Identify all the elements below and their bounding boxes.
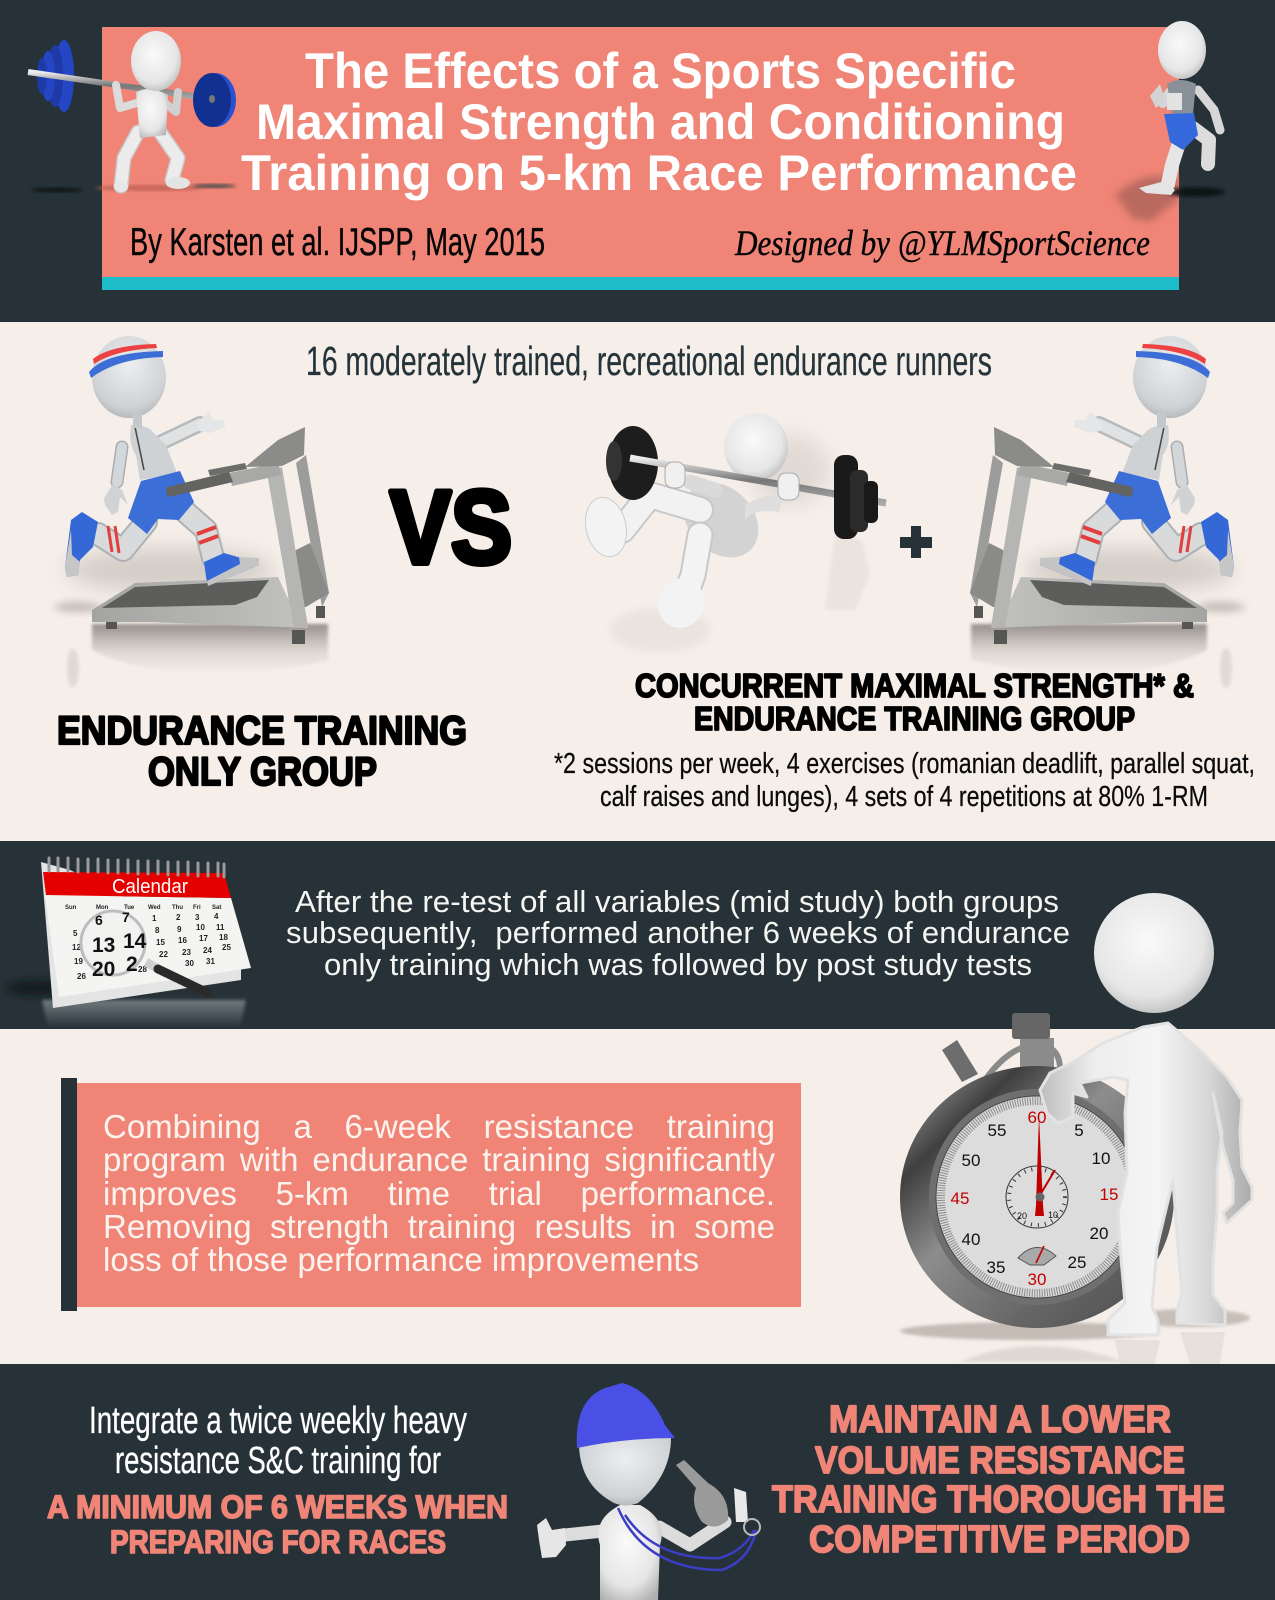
icon: calendar with magnifier: 5 — [73, 929, 78, 938]
icon: stopwatch: 55 — [988, 1121, 1006, 1140]
icon: stopwatch: 15 — [1100, 1185, 1118, 1204]
retest text — [286, 884, 1070, 982]
vs label: VS — [390, 470, 512, 586]
icon: calendar with magnifier: 10 — [196, 923, 205, 932]
icon: calendar with magnifier: Tue — [124, 905, 135, 911]
icon: calendar with magnifier: Fri — [193, 905, 201, 911]
icon: weightlifter — [28, 31, 236, 192]
recommendation: twice weekly: Integrate a twice weekly heavy — [89, 1400, 467, 1442]
icon: calendar with magnifier: 14 — [123, 930, 147, 953]
icon: stopwatch — [900, 1013, 1174, 1362]
heading: endurance only group: ENDURANCE TRAINING — [57, 709, 467, 753]
icon: stopwatch: 20 — [1017, 1211, 1027, 1221]
icon: calendar with magnifier: 25 — [222, 943, 231, 952]
recommendation: minimum of 6 weeks — [47, 1489, 508, 1560]
title — [241, 43, 1077, 201]
icon: calendar with magnifier: 8 — [155, 926, 160, 935]
icon: calendar with magnifier: 18 — [219, 933, 228, 942]
icon: calendar with magnifier: 2 — [176, 913, 181, 922]
retest text: After the re-test of all variables (mid study) both groups — [295, 884, 1059, 919]
recommendation: maintain lower volume: COMPETITIVE PERIOD — [809, 1519, 1190, 1561]
icon: calendar with magnifier: 28 — [138, 965, 147, 974]
icon: calendar with magnifier: 30 — [185, 959, 194, 968]
recommendation: twice weekly: resistance S&C training for — [115, 1440, 441, 1482]
recommendation: twice weekly — [89, 1400, 467, 1482]
finding text: improves 5-km time trial performance. — [103, 1175, 775, 1212]
icon: stopwatch: 10 — [1048, 1210, 1058, 1220]
icon: calendar with magnifier: 3 — [195, 913, 200, 922]
icon: calendar with magnifier: 1 — [152, 914, 157, 923]
icon: calendar with magnifier: 31 — [206, 957, 215, 966]
icon: calendar with magnifier: 24 — [203, 946, 212, 955]
icon: calendar with magnifier: 11 — [216, 923, 225, 932]
icon: calendar with magnifier: 23 — [182, 948, 191, 957]
icon: calendar with magnifier: 9 — [177, 925, 182, 934]
icon: stopwatch: 60 — [1028, 1108, 1046, 1127]
icon: calendar with magnifier: 16 — [178, 936, 187, 945]
heading: endurance only group: ONLY GROUP — [148, 750, 377, 794]
heading: concurrent group: CONCURRENT MAXIMAL STRENGTH* & — [635, 667, 1194, 704]
retest text: subsequently, performed another 6 weeks of endurance — [286, 915, 1070, 950]
panel: finding callout — [61, 1078, 801, 1311]
icon: calendar with magnifier: 22 — [159, 950, 168, 959]
icon: calendar with magnifier: Mon — [96, 905, 109, 911]
recommendation: maintain lower volume: TRAINING THOROUGH THE — [772, 1479, 1225, 1521]
icon: stopwatch: 25 — [1068, 1253, 1086, 1272]
citation: By Karsten et al. IJSPP, May 2015 — [130, 221, 545, 264]
icon: treadmill runner (concurrent group) — [970, 336, 1245, 688]
icon: stopwatch: 45 — [951, 1189, 969, 1208]
recommendation: minimum of 6 weeks: PREPARING FOR RACES — [110, 1524, 446, 1560]
icon: calendar with magnifier: Sun — [65, 905, 77, 911]
retest text: only training which was followed by post study tests — [324, 947, 1032, 982]
icon: stopwatch: 50 — [962, 1151, 980, 1170]
icon: treadmill runner (endurance only group) — [54, 336, 329, 688]
icon: calendar with magnifier: 17 — [199, 934, 208, 943]
panel: title banner — [102, 27, 1179, 290]
icon: plus — [900, 526, 932, 558]
heading: concurrent group — [635, 667, 1194, 737]
icon: calendar with magnifier: 26 — [77, 972, 86, 981]
icon: bench press figure — [580, 413, 886, 652]
heading: concurrent group: ENDURANCE TRAINING GROUP — [694, 700, 1135, 737]
finding text: Combining a 6-week resistance training — [103, 1108, 775, 1145]
intro text: 16 moderately trained, recreational endurance runners — [306, 338, 992, 384]
icon: stopwatch: 5 — [1074, 1121, 1084, 1140]
title: The Effects of a Sports Specific — [305, 43, 1016, 99]
icon: calendar with magnifier: 13 — [92, 934, 115, 957]
icon: calendar with magnifier: Calendar — [112, 876, 188, 898]
icon: stopwatch: 30 — [1028, 1270, 1046, 1289]
icon: calendar with magnifier — [7, 858, 251, 1028]
heading: endurance only group — [57, 709, 467, 794]
protocol note — [554, 748, 1255, 813]
title: Maximal Strength and Conditioning — [256, 94, 1065, 150]
designer credit: Designed by @YLMSportScience — [734, 223, 1150, 263]
icon: stopwatch: 20 — [1090, 1224, 1108, 1243]
recommendation: maintain lower volume — [772, 1399, 1225, 1561]
recommendation: maintain lower volume: MAINTAIN A LOWER — [829, 1399, 1171, 1441]
recommendation: maintain lower volume: VOLUME RESISTANCE — [815, 1440, 1185, 1482]
title: Training on 5-km Race Performance — [241, 145, 1077, 201]
icon: calendar with magnifier: Thu — [172, 905, 183, 911]
icon: calendar with magnifier: 20 — [92, 958, 115, 981]
icon: figure leaning on stopwatch — [1040, 893, 1252, 1364]
icon: stopwatch: 10 — [1092, 1149, 1110, 1168]
icon: calendar with magnifier: 4 — [214, 912, 219, 921]
icon: calendar with magnifier: 15 — [156, 938, 165, 947]
icon: calendar with magnifier: 19 — [74, 957, 83, 966]
icon: calendar with magnifier: 7 — [122, 909, 130, 925]
whistle coach figure — [537, 1383, 760, 1600]
icon: calendar with magnifier: Sat — [212, 905, 221, 911]
finding text: program with endurance training significantly — [103, 1141, 775, 1178]
icon: stopwatch: 35 — [987, 1258, 1005, 1277]
finding text: Removing strength training results in some — [103, 1208, 775, 1245]
recommendation: minimum of 6 weeks: A MINIMUM OF 6 WEEKS WHEN — [47, 1489, 508, 1525]
icon: calendar with magnifier: Wed — [148, 905, 161, 911]
icon: calendar with magnifier: 2 — [126, 953, 138, 976]
icon: calendar with magnifier: 6 — [95, 912, 103, 928]
finding text: loss of those performance improvements — [103, 1241, 699, 1278]
icon: stopwatch: 40 — [962, 1230, 980, 1249]
icon: runner top right — [1115, 21, 1225, 222]
icon: calendar with magnifier: 12 — [72, 943, 81, 952]
